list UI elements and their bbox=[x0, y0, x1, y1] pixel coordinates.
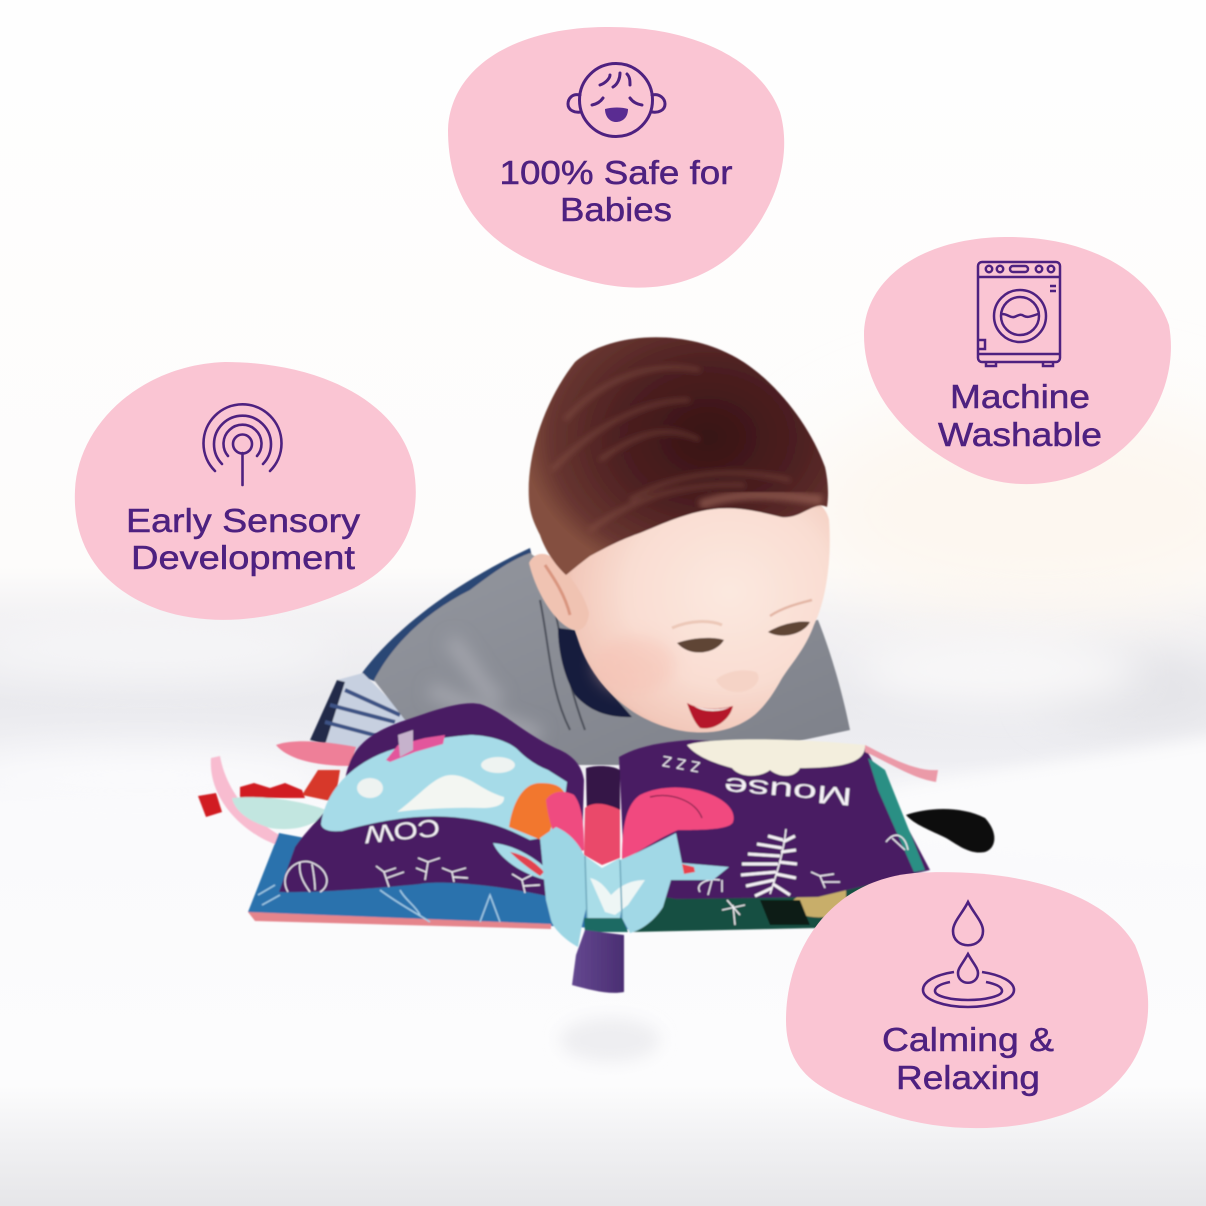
book: blue hill bbox=[321, 735, 567, 840]
baby body: jeans, sleeve and grey sweater bbox=[310, 548, 850, 765]
book: pink grass and house bbox=[386, 735, 445, 762]
book: dark spine bbox=[586, 766, 620, 822]
baby eyes bbox=[677, 638, 724, 653]
book: plant outlines on base bbox=[258, 885, 500, 922]
badge: calming and relaxing bbox=[786, 872, 1148, 1128]
baby head bbox=[529, 337, 830, 733]
baby mouth bbox=[687, 703, 733, 728]
book: left arched page bbox=[279, 703, 584, 897]
book: green collar near tab bbox=[584, 918, 628, 932]
book: black patch bbox=[760, 900, 810, 925]
badge text: 100% Safe for bbox=[500, 154, 733, 191]
icon: washing machine bbox=[978, 262, 1060, 366]
badge: 100% safe for babies bbox=[448, 27, 784, 288]
icon: sensory waves bbox=[204, 404, 282, 485]
baby bbox=[310, 337, 850, 765]
cloth book bbox=[198, 703, 994, 993]
badge text: Relaxing bbox=[896, 1059, 1040, 1096]
baby cheek bbox=[595, 637, 675, 693]
badge text bbox=[938, 378, 1102, 453]
book label: cow: COW bbox=[362, 813, 441, 848]
badge text bbox=[882, 1021, 1054, 1096]
book: black ear tab bbox=[906, 809, 994, 853]
badge text: Development bbox=[131, 539, 355, 576]
badge text: Babies bbox=[560, 191, 672, 228]
book: mouse illustration bbox=[687, 739, 865, 776]
book: white cloud bbox=[397, 775, 504, 812]
badge: machine washable bbox=[864, 237, 1171, 484]
book: right page green lower bbox=[630, 880, 900, 932]
book: fern leaf bbox=[741, 829, 797, 896]
badge text: Early Sensory bbox=[126, 502, 361, 539]
book label: mouse: Mouse bbox=[723, 771, 854, 811]
badge text: Washable bbox=[938, 416, 1102, 453]
book: pink string bbox=[865, 745, 938, 782]
book: brass bell bbox=[790, 889, 846, 917]
baby hair bbox=[529, 337, 828, 575]
badge text: Machine bbox=[950, 378, 1090, 415]
book: elephant body bbox=[493, 843, 548, 880]
badge: early sensory development bbox=[75, 362, 416, 620]
book: white plant sprigs bbox=[285, 835, 908, 925]
icon: baby face bbox=[568, 64, 665, 136]
baby nose bbox=[716, 670, 759, 692]
badge text bbox=[126, 502, 361, 576]
book: teal edge bbox=[868, 758, 925, 872]
badge text: Calming & bbox=[882, 1021, 1054, 1058]
book: orange ear bbox=[509, 783, 564, 842]
book: blue base bbox=[248, 833, 640, 930]
book label: zzz: Z Z Z bbox=[661, 752, 701, 775]
icon: water drop bbox=[923, 902, 1014, 1007]
book: purple tag bbox=[572, 930, 624, 993]
book: elephant ears bbox=[546, 792, 584, 860]
baby ear bbox=[529, 554, 589, 630]
book: cloth toys on left bbox=[198, 741, 356, 846]
badge text bbox=[500, 154, 733, 228]
book: right purple page bbox=[619, 740, 930, 899]
